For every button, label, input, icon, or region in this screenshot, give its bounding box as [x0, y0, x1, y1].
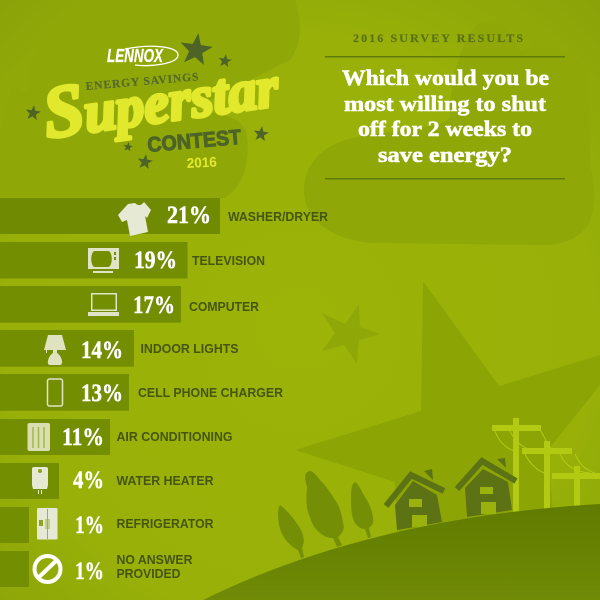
row: no answer provided — [0, 551, 192, 587]
survey heading: 2016 SURVEY RESULTS — [353, 31, 523, 45]
row: washer/dryer: WASHER/DRYER — [228, 210, 328, 224]
question: most willing to shut — [344, 91, 547, 116]
question — [342, 65, 549, 167]
row: computer: COMPUTER — [189, 300, 259, 314]
row: indoor lights — [0, 330, 238, 367]
row: cell phone charger — [0, 374, 283, 411]
row: air conditioning: AIR CONDITIONING — [116, 430, 232, 444]
row: water heater: WATER HEATER — [116, 474, 214, 488]
logo: Lennox: LENNOX — [107, 46, 164, 66]
house left — [386, 469, 444, 530]
row: computer: 17% — [133, 292, 175, 319]
row: air conditioning: 11% — [62, 424, 104, 451]
row: cell phone charger: 13% — [81, 380, 123, 407]
house right — [457, 458, 516, 517]
rule bottom — [325, 178, 565, 180]
row: cell phone charger: CELL PHONE CHARGER — [138, 386, 283, 400]
row: no answer provided: 1% — [75, 558, 104, 585]
row: indoor lights: 14% — [81, 337, 123, 364]
power poles — [492, 418, 600, 513]
row: refrigerator: REFRIGERATOR — [116, 517, 214, 531]
row: television: TELEVISION — [192, 254, 265, 268]
row: water heater: 4% — [73, 467, 104, 494]
question: Which would you be — [342, 65, 549, 90]
rule top — [325, 56, 565, 58]
row: air conditioning — [0, 419, 232, 455]
contest stars — [25, 31, 270, 169]
year 2016: 2016 — [186, 153, 217, 171]
trees — [278, 471, 373, 558]
large background star — [295, 281, 600, 600]
contest: CONTEST — [146, 126, 242, 157]
row: water heater — [0, 463, 214, 499]
row: computer — [0, 286, 259, 323]
superstar: Superstar — [38, 41, 283, 155]
left cloud — [0, 0, 300, 198]
small background star — [322, 304, 381, 364]
row: no answer provided: NO ANSWER — [116, 553, 192, 567]
row: television: 19% — [134, 247, 177, 274]
hill — [203, 504, 600, 600]
question: off for 2 weeks to — [358, 116, 532, 141]
question: save energy? — [378, 142, 512, 167]
row: washer/dryer — [0, 198, 328, 236]
row: indoor lights: INDOOR LIGHTS — [140, 342, 238, 356]
row: refrigerator — [0, 507, 214, 543]
right cloud — [304, 22, 595, 245]
row: television — [0, 242, 265, 278]
row: no answer provided: PROVIDED — [116, 567, 180, 581]
row: washer/dryer: 21% — [167, 202, 211, 229]
row: refrigerator: 1% — [75, 512, 104, 539]
energy savings: ENERGY SAVINGS — [85, 71, 199, 93]
